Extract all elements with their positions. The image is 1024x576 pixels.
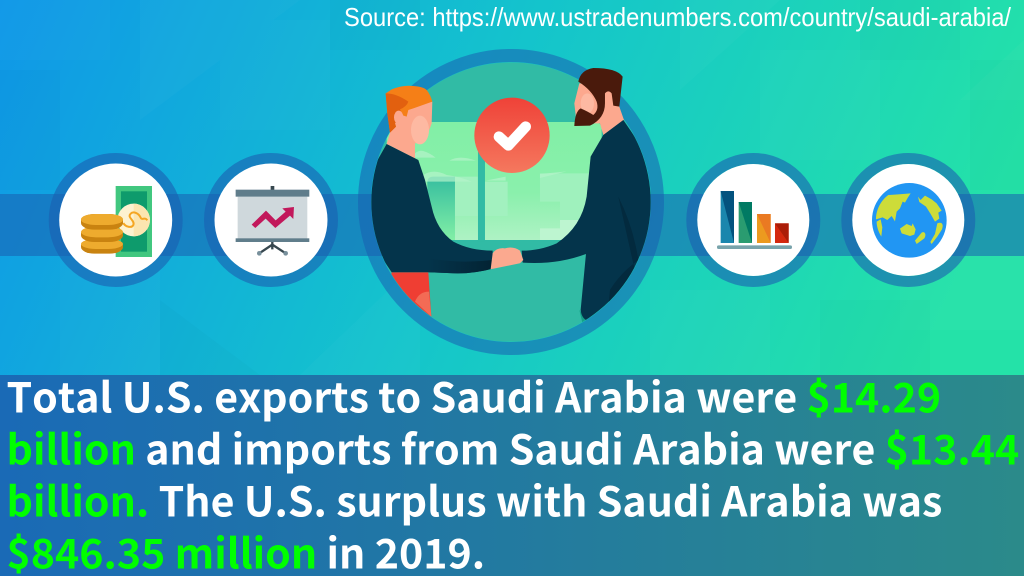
icon: presentation board with rising arrow xyxy=(210,158,332,282)
horizontal band xyxy=(0,194,1024,256)
icon: coins and banknote xyxy=(54,158,177,282)
handshake xyxy=(491,248,523,269)
bottom text panel xyxy=(0,364,1024,576)
summary text: billion. The U.S. surplus with Saudi Arabia was xyxy=(6,468,942,528)
summary text: billion and imports from Saudi Arabia were $13.44 xyxy=(6,416,1019,476)
window with city xyxy=(387,120,602,242)
central handshake illustration xyxy=(364,56,660,348)
summary text: Total U.S. exports to Saudi Arabia were $14.29 xyxy=(6,364,941,424)
person left xyxy=(370,86,493,317)
check badge xyxy=(474,98,550,173)
circle backdrop xyxy=(371,62,651,342)
person right xyxy=(522,68,660,327)
icon: globe xyxy=(847,158,970,282)
icon: bar chart xyxy=(692,158,815,282)
